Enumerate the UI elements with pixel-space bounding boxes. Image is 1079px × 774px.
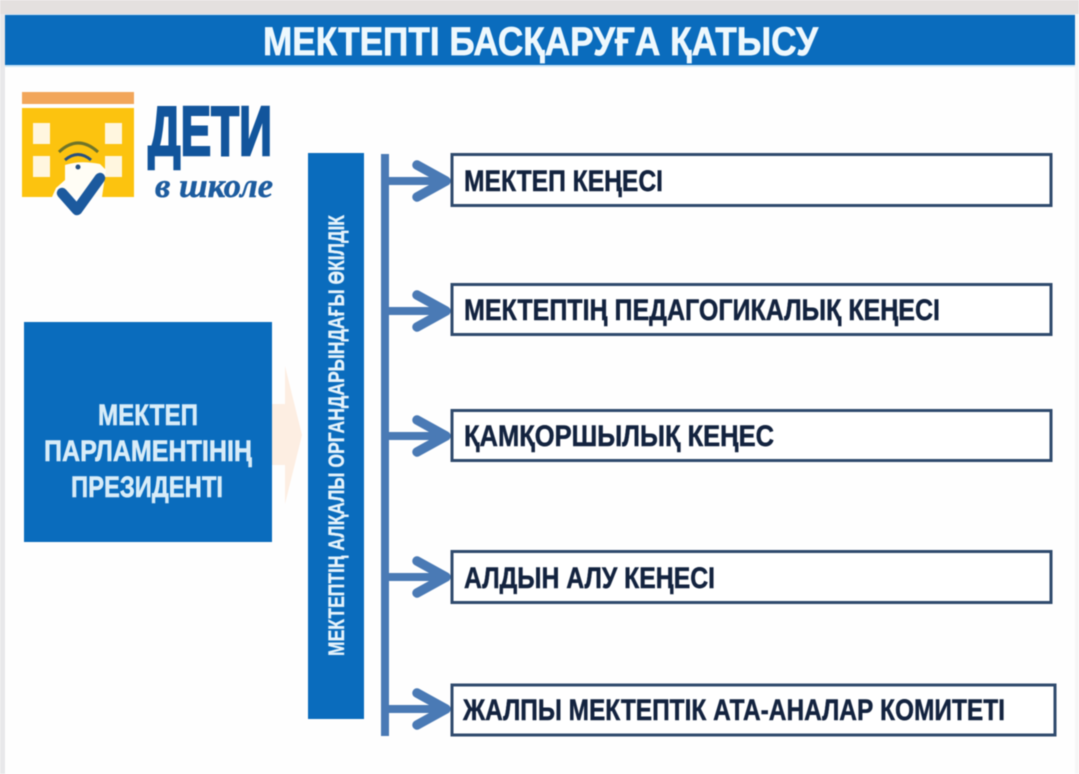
connector: vertical trunk line [381, 154, 389, 736]
box: pedagogical council: МЕКТЕПТІҢ ПЕДАГОГИКАЛЫҚ КЕҢЕСІ [464, 294, 940, 327]
panel: school parliament president [24, 322, 272, 542]
panel: representation in collegial governing bodies: МЕКТЕПТІҢ АЛҚАЛЫ ОРГАНДАРЫНДАҒЫ ӨКІЛДІК [324, 215, 349, 656]
box: pedagogical council [452, 284, 1051, 334]
logo text: в школе: в школе [155, 168, 273, 205]
icon: school building with wifi and check mark [22, 92, 134, 210]
title banner: МЕКТЕПТІ БАСҚАРУҒА ҚАТЫСУ [263, 20, 819, 64]
box: school council: МЕКТЕП КЕҢЕСІ [464, 165, 663, 198]
arrow: pale arrow from president to collegial bodies panel [272, 366, 302, 504]
box: school council [452, 154, 1051, 206]
panel: school parliament president: ПРЕЗИДЕНТІ [71, 471, 223, 504]
box: school-wide parents committee [452, 685, 1055, 735]
logo: Дети в школе [22, 92, 273, 210]
box: board of trustees: ҚАМҚОРШЫЛЫҚ КЕҢЕС [464, 420, 774, 453]
box: prevention council: АЛДЫН АЛУ КЕҢЕСІ [464, 562, 715, 595]
panel: representation in collegial governing bodies [308, 153, 364, 719]
arrow: to pedagogical council [389, 295, 446, 327]
arrow: to prevention council [389, 561, 446, 593]
logo text: Дети: ДЕТИ [148, 92, 272, 170]
panel: school parliament president: МЕКТЕП [98, 399, 198, 432]
arrow: to board of trustees [389, 420, 446, 452]
panel: school parliament president: ПАРЛАМЕНТІНІҢ [44, 435, 252, 468]
arrow: to school council [389, 165, 446, 197]
title banner [5, 15, 1075, 65]
box: prevention council [452, 552, 1051, 602]
box: board of trustees [452, 410, 1051, 460]
arrow: to parents committee [389, 693, 446, 725]
